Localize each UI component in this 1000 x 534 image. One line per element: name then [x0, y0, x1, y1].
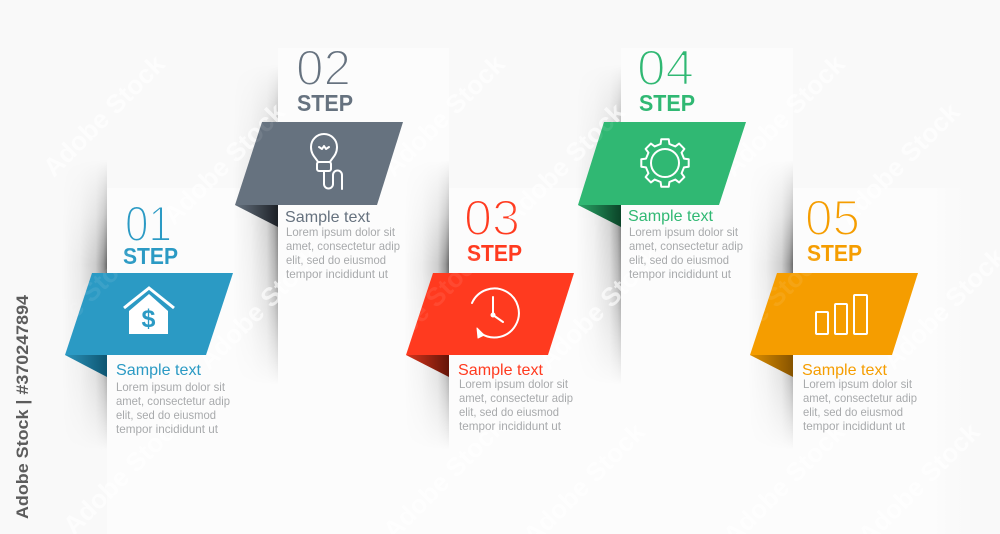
step 3 body text: elit, sed do eiusmod [459, 405, 559, 419]
step 2 body text: Lorem ipsum dolor sit [286, 225, 396, 239]
step 4 [578, 40, 746, 281]
step 4 body text [629, 225, 743, 281]
icon: bar chart [816, 295, 867, 334]
step 3 heading: Sample text [458, 362, 544, 379]
watermark pattern on paper: Adobe Stock [717, 48, 851, 182]
step 2 body text [286, 225, 400, 281]
step 4 number: 04 [637, 40, 694, 96]
step 1 label: STEP [123, 243, 178, 269]
step 1 heading: Sample text [116, 362, 202, 379]
step 1 [65, 196, 233, 436]
watermark pattern on paper: Adobe Stock [192, 241, 326, 375]
step 1 body text: amet, consectetur adip [116, 394, 230, 408]
watermark pattern on paper: Adobe Stock [832, 96, 966, 230]
icon: clock with arrow [472, 288, 519, 338]
step 5 ribbon [750, 273, 918, 355]
step 3 number: 03 [464, 190, 520, 246]
watermark pattern over ribbons: Adobe Stock [497, 96, 631, 230]
watermark pattern over ribbons [12, 96, 831, 375]
step 4 body text: amet, consectetur adip [629, 239, 743, 253]
step 2 number: 02 [296, 40, 351, 96]
watermark pattern over ribbons: Adobe Stock [357, 241, 491, 375]
step 5 ribbon fold [750, 355, 793, 377]
step 4 label: STEP [639, 90, 695, 116]
step 5 body text: amet, consectetur adip [803, 391, 917, 405]
watermark pattern on paper: Adobe Stock [377, 48, 511, 182]
watermark pattern over ribbons: Adobe Stock [12, 236, 146, 370]
step 5 body text: tempor incididunt ut [803, 419, 906, 433]
watermark pattern on paper: Adobe Stock [157, 96, 291, 230]
panel: step 4 background [587, 73, 621, 376]
step 4 body text: tempor incididunt ut [629, 267, 732, 281]
watermark pattern on paper: Adobe Stock [37, 48, 171, 182]
side credit: Adobe Stock | #370247894 [13, 294, 32, 519]
step 1 body text: elit, sed do eiusmod [116, 408, 216, 422]
step 3 label: STEP [467, 240, 522, 266]
panel: step 2 background [243, 73, 278, 376]
step 3 ribbon fold [406, 355, 449, 377]
step 3 ribbon [406, 273, 574, 355]
step 3 body text [459, 377, 573, 433]
step 5 [750, 190, 918, 433]
watermark pattern on paper: Adobe Stock [532, 241, 666, 375]
step 5 heading: Sample text [802, 362, 888, 379]
step 2 ribbon [235, 122, 403, 205]
step 2 heading: Sample text [285, 209, 371, 226]
step 1 body text: Lorem ipsum dolor sit [116, 380, 226, 394]
step 3 body text: tempor incididunt ut [459, 419, 562, 433]
icon: light bulb [311, 134, 342, 189]
panel: step 5 background [758, 168, 793, 442]
icon: gear [641, 139, 689, 187]
step 4 heading: Sample text [628, 208, 714, 225]
step 5 number: 05 [805, 190, 860, 246]
step 2 body text: tempor incididunt ut [286, 267, 389, 281]
step 5 body text: elit, sed do eiusmod [803, 405, 903, 419]
step 4 body text: elit, sed do eiusmod [629, 253, 729, 267]
step 3 [406, 190, 574, 433]
step 1 body text: tempor incididunt ut [116, 422, 219, 436]
step 3 body text: Lorem ipsum dolor sit [459, 377, 569, 391]
step 5 body text: Lorem ipsum dolor sit [803, 377, 913, 391]
icon: house with dollar [124, 288, 174, 334]
step 2 body text: amet, consectetur adip [286, 239, 400, 253]
step 2 ribbon fold [235, 205, 278, 227]
step 2 [235, 40, 403, 281]
step 5 label: STEP [807, 240, 862, 266]
step 2 body text: elit, sed do eiusmod [286, 253, 386, 267]
step 4 ribbon fold [578, 205, 621, 227]
panel: step 1 background [72, 168, 107, 442]
watermark pattern on paper: Adobe Stock [497, 96, 631, 230]
step 1 number: 01 [125, 196, 172, 252]
step 1 body text [116, 380, 230, 436]
watermark pattern over ribbons: Adobe Stock [157, 96, 291, 230]
panel: step 3 background [414, 168, 449, 442]
step 5 body text [803, 377, 917, 433]
step 1 ribbon [65, 273, 233, 355]
step 1 ribbon fold [65, 355, 107, 377]
step 2 label: STEP [297, 90, 353, 116]
step 4 body text: Lorem ipsum dolor sit [629, 225, 739, 239]
step 4 ribbon [578, 122, 746, 205]
icon: house with dollar: $ [142, 305, 156, 333]
step 3 body text: amet, consectetur adip [459, 391, 573, 405]
watermark pattern over ribbons: Adobe Stock [697, 241, 831, 375]
